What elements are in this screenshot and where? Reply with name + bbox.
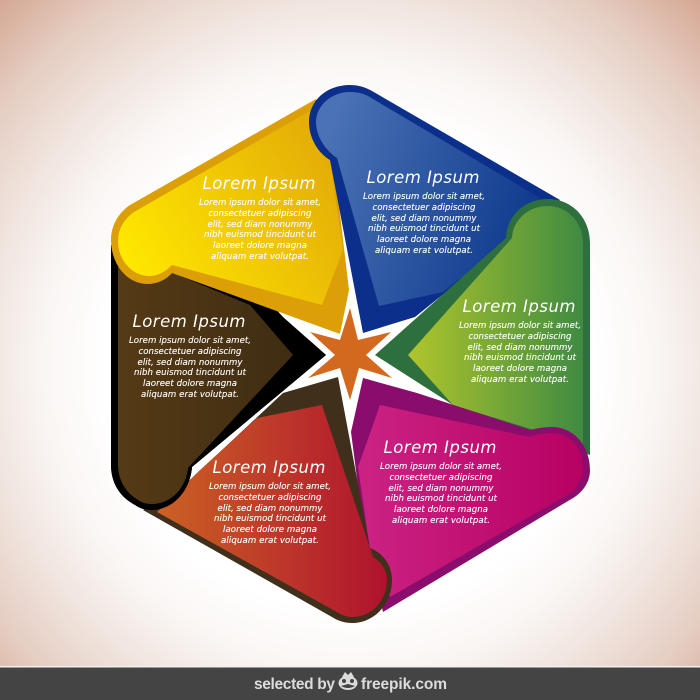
text block: yellow: laoreet dolore magna xyxy=(213,241,307,251)
panel: red xyxy=(143,377,392,623)
text block: blue: Lorem ipsum dolor sit amet, xyxy=(363,192,485,202)
text block: green: Lorem Ipsum xyxy=(462,297,576,316)
text block: brown: Lorem Ipsum xyxy=(132,312,246,331)
text block: blue: consectetuer adipiscing xyxy=(372,203,476,213)
text block: yellow: Lorem Ipsum xyxy=(202,174,316,193)
text block: brown: elit, sed diam nonummy xyxy=(138,358,243,368)
text block: yellow: aliquam erat volutpat. xyxy=(211,252,309,262)
text block: red xyxy=(209,458,331,546)
text block: yellow: elit, sed diam nonummy xyxy=(208,220,313,230)
text block: blue: nibh euismod tincidunt ut xyxy=(368,224,481,234)
text block: brown: laoreet dolore magna xyxy=(143,379,237,389)
text block: green: elit, sed diam nonummy xyxy=(468,343,573,353)
text block: brown: aliquam erat volutpat. xyxy=(141,390,239,400)
text block: green: Lorem ipsum dolor sit amet, xyxy=(459,321,581,331)
text block: red: consectetuer adipiscing xyxy=(218,493,322,503)
text block: green: nibh euismod tincidunt ut xyxy=(464,353,577,363)
panel: blue xyxy=(309,85,560,333)
text block: green xyxy=(459,297,581,385)
text block: magenta: laoreet dolore magna xyxy=(394,505,488,515)
text block: blue xyxy=(363,168,485,256)
text block: blue: aliquam erat volutpat. xyxy=(375,246,473,256)
panel: yellow xyxy=(111,99,349,334)
text block: magenta: elit, sed diam nonummy xyxy=(388,484,494,494)
panel: brown overlap xyxy=(111,340,326,510)
text block: red: nibh euismod tincidunt ut xyxy=(214,514,327,524)
text block: brown xyxy=(129,312,251,400)
text block: magenta: nibh euismod tincidunt ut xyxy=(385,494,498,504)
footer bar xyxy=(0,666,700,700)
text block: red: laoreet dolore magna xyxy=(223,525,317,535)
footer text: selected by: selected by xyxy=(254,676,335,693)
text block: red: Lorem ipsum dolor sit amet, xyxy=(209,482,331,492)
footer text: freepik.com: freepik.com xyxy=(361,676,447,693)
text block: red: elit, sed diam nonummy xyxy=(218,504,323,514)
text block: magenta: Lorem ipsum dolor sit amet, xyxy=(380,462,502,472)
text block: blue: Lorem Ipsum xyxy=(366,168,480,187)
text block: magenta: aliquam erat volutpat. xyxy=(392,516,490,526)
text block: red: aliquam erat volutpat. xyxy=(221,536,319,546)
text block: red: Lorem Ipsum xyxy=(212,458,326,477)
panel: brown base xyxy=(111,245,326,510)
text block: yellow: consectetuer adipiscing xyxy=(208,209,312,219)
panel: magenta xyxy=(351,378,590,612)
text block: green: aliquam erat volutpat. xyxy=(471,375,569,385)
text block: blue: elit, sed diam nonummy xyxy=(372,214,477,224)
text block: brown: nibh euismod tincidunt ut xyxy=(134,368,247,378)
text block: magenta xyxy=(380,438,502,526)
text block: yellow xyxy=(199,174,321,262)
text block: yellow: nibh euismod tincidunt ut xyxy=(204,230,317,240)
text block: yellow: Lorem ipsum dolor sit amet, xyxy=(199,198,321,208)
text block: brown: Lorem ipsum dolor sit amet, xyxy=(129,336,251,346)
text block: green: laoreet dolore magna xyxy=(473,364,567,374)
text block: magenta: Lorem Ipsum xyxy=(384,438,496,457)
text block: brown: consectetuer adipiscing xyxy=(138,347,242,357)
text block: magenta: consectetuer adipiscing xyxy=(390,473,493,483)
text block: green: consectetuer adipiscing xyxy=(468,332,572,342)
panel: green xyxy=(375,199,590,455)
text block: blue: laoreet dolore magna xyxy=(377,235,471,245)
icon: centre star xyxy=(308,308,392,400)
icon: freepik mascot xyxy=(338,672,358,690)
